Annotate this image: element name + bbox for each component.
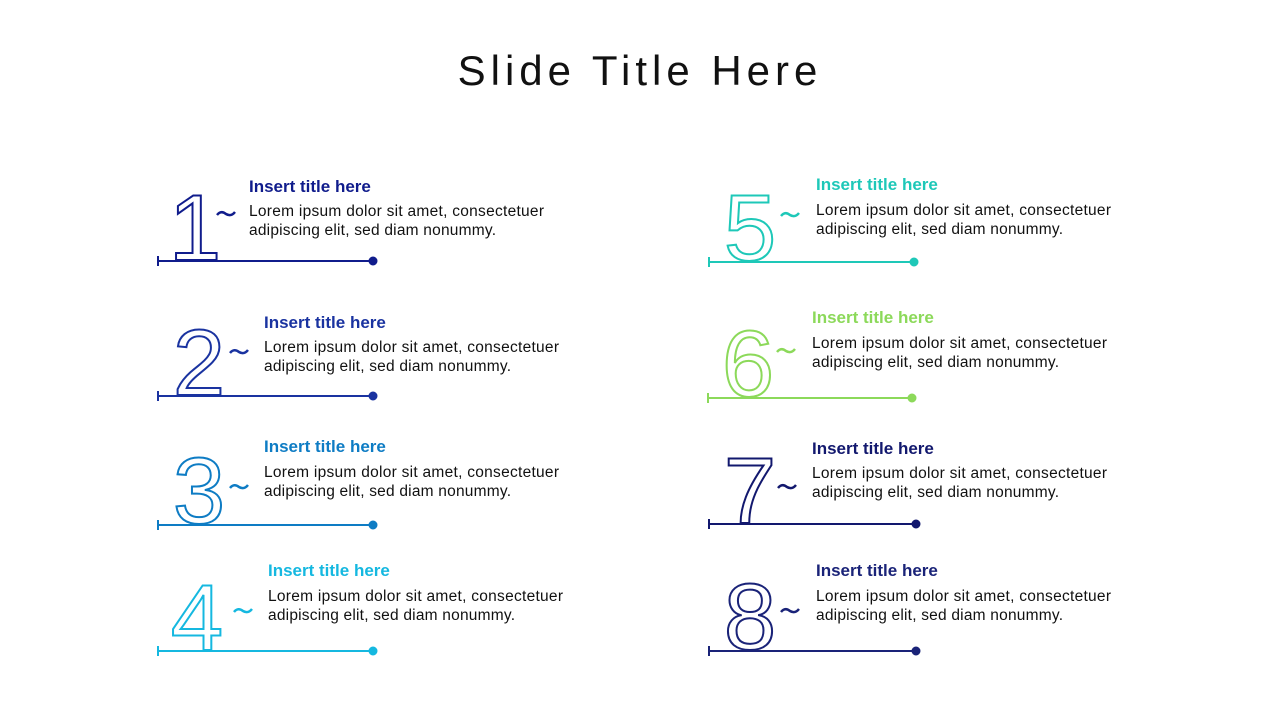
connector line 7 — [709, 519, 920, 529]
item 3 — [158, 437, 559, 543]
heading 3: Insert title here — [264, 437, 386, 456]
connector line 5 — [709, 257, 918, 267]
body 8: Lorem ipsum dolor sit amet, consectetuer — [816, 588, 1111, 605]
item 8: adipiscing elit, sed diam nonummy. — [816, 607, 1063, 624]
heading 6: Insert title here — [812, 308, 934, 327]
tilde 1 — [217, 212, 235, 215]
tilde 4 — [234, 609, 252, 612]
item 1 — [158, 175, 544, 280]
heading 5: Insert title here — [816, 175, 938, 194]
item 5: adipiscing elit, sed diam nonummy. — [816, 221, 1063, 238]
heading 2: Insert title here — [264, 313, 386, 332]
item 4 — [158, 561, 563, 670]
numeral 3: 3 — [173, 438, 225, 543]
title: Slide Title Here — [458, 47, 822, 94]
connector line 2 — [158, 391, 376, 401]
item 5 — [709, 175, 1111, 280]
body 7: Lorem ipsum dolor sit amet, consectetuer — [812, 465, 1107, 482]
item 7: adipiscing elit, sed diam nonummy. — [812, 484, 1059, 501]
item 7 — [709, 438, 1107, 543]
body 5: Lorem ipsum dolor sit amet, consectetuer — [816, 202, 1111, 219]
numeral 4: 4 — [171, 565, 223, 670]
tilde 8 — [781, 609, 799, 612]
item 6: adipiscing elit, sed diam nonummy. — [812, 354, 1059, 371]
body 3: Lorem ipsum dolor sit amet, consectetuer — [264, 464, 559, 481]
tilde 2 — [230, 350, 248, 353]
heading 1: Insert title here — [249, 177, 371, 196]
item 8 — [709, 561, 1111, 669]
numeral 7: 7 — [724, 438, 776, 543]
item 3: adipiscing elit, sed diam nonummy. — [264, 483, 511, 500]
item 2 — [158, 310, 559, 415]
tilde 5 — [781, 213, 799, 216]
item 4: adipiscing elit, sed diam nonummy. — [268, 607, 515, 624]
body 1: Lorem ipsum dolor sit amet, consectetuer — [249, 203, 544, 220]
body 6: Lorem ipsum dolor sit amet, consectetuer — [812, 335, 1107, 352]
heading 8: Insert title here — [816, 561, 938, 580]
item 6 — [708, 308, 1107, 416]
heading 7: Insert title here — [812, 439, 934, 458]
tilde 3 — [230, 485, 248, 488]
numeral 8: 8 — [724, 564, 776, 669]
connector line 3 — [158, 520, 376, 530]
numeral 5: 5 — [724, 175, 776, 280]
body 2: Lorem ipsum dolor sit amet, consectetuer — [264, 339, 559, 356]
numeral 1: 1 — [169, 175, 221, 280]
connector line 4 — [158, 646, 376, 656]
connector line 6 — [708, 393, 916, 403]
numeral 2: 2 — [173, 310, 225, 415]
connector line 8 — [709, 646, 920, 656]
numeral 6: 6 — [722, 311, 774, 416]
item 1: adipiscing elit, sed diam nonummy. — [249, 222, 496, 239]
body 4: Lorem ipsum dolor sit amet, consectetuer — [268, 588, 563, 605]
item 2: adipiscing elit, sed diam nonummy. — [264, 358, 511, 375]
tilde 7 — [778, 485, 796, 488]
connector line 1 — [158, 256, 376, 266]
heading 4: Insert title here — [268, 561, 390, 580]
tilde 6 — [777, 349, 795, 352]
